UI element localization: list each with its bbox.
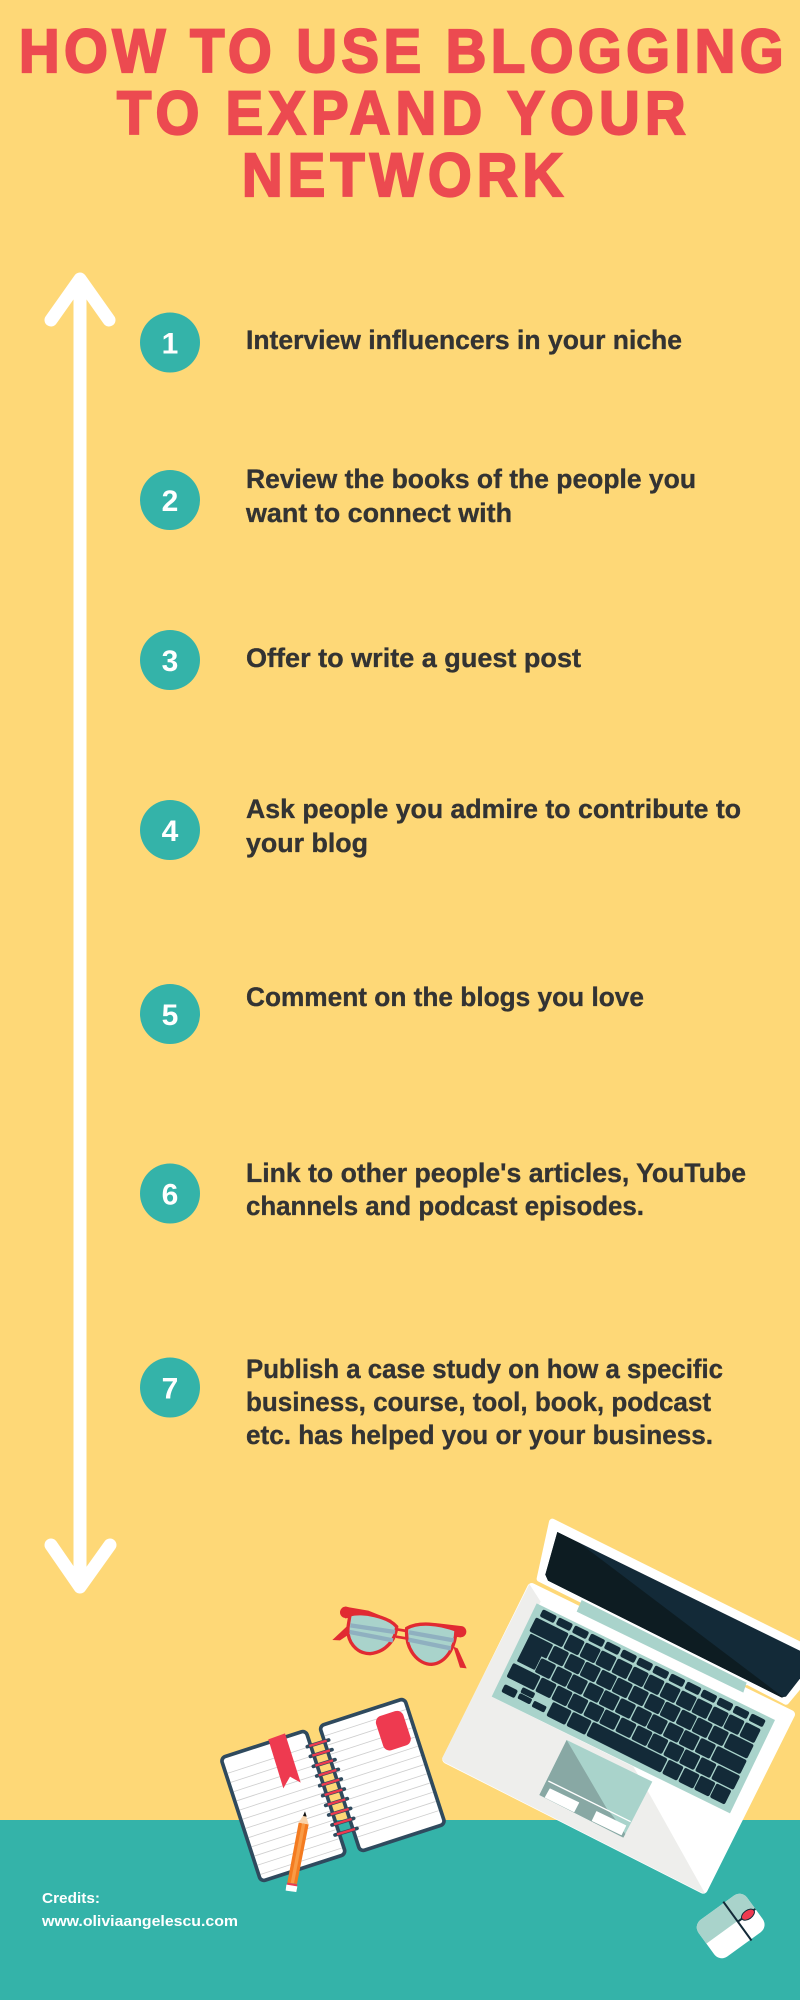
step 7: etc. has helped you or your business. <box>246 1420 713 1450</box>
bookmark <box>268 1733 301 1788</box>
laptop lid <box>540 1522 800 1701</box>
pencil <box>286 1811 309 1892</box>
step 1: 1 <box>162 328 178 360</box>
step 7: 7 <box>162 1372 178 1406</box>
laptop screen <box>545 1532 800 1697</box>
step 1: Interview influencers in your niche <box>246 325 682 355</box>
credits: www.oliviaangelescu.com <box>41 1913 238 1930</box>
step 6: channels and podcast episodes. <box>246 1191 644 1221</box>
step 3 <box>140 630 581 690</box>
credits <box>41 1890 238 1930</box>
step 2: want to connect with <box>245 498 512 528</box>
hinge <box>577 1600 747 1693</box>
step 4 <box>140 794 741 860</box>
step 6 <box>140 1158 746 1224</box>
step 3: 3 <box>162 645 178 678</box>
keys <box>499 1608 768 1805</box>
arrow: double-headed vertical <box>51 279 110 1587</box>
step 2 <box>140 464 696 530</box>
icon: mouse <box>692 1889 769 1963</box>
step 2: Review the books of the people you <box>246 464 696 494</box>
step 4: 4 <box>162 815 179 848</box>
step 7: business, course, tool, book, podcast <box>246 1387 711 1417</box>
step 5: Comment on the blogs you love <box>246 982 644 1012</box>
right page <box>319 1698 445 1852</box>
step 1 <box>140 312 682 372</box>
step 4: Ask people you admire to contribute to <box>246 794 741 824</box>
spiral binding <box>307 1740 357 1835</box>
title <box>19 18 784 210</box>
keyboard panel <box>492 1603 775 1813</box>
laptop base <box>447 1587 791 1889</box>
icon: spiral notebook <box>221 1698 445 1892</box>
step 6: 6 <box>162 1178 178 1212</box>
step 3: Offer to write a guest post <box>246 643 581 673</box>
step 7 <box>140 1354 723 1450</box>
icon: glasses <box>332 1607 467 1668</box>
step 6: Link to other people's articles, YouTube <box>246 1158 746 1188</box>
left page <box>221 1730 346 1882</box>
title: NETWORK <box>242 142 563 210</box>
step 5 <box>140 982 644 1044</box>
icon: laptop <box>442 1522 800 1893</box>
step 7: Publish a case study on how a specific <box>246 1354 723 1384</box>
step 4: your blog <box>246 828 368 858</box>
red note <box>374 1709 413 1752</box>
credits: Credits: <box>42 1890 100 1907</box>
trackpad <box>539 1740 652 1838</box>
title: HOW TO USE BLOGGING <box>19 18 784 86</box>
title: TO EXPAND YOUR <box>117 80 686 148</box>
step 5: 5 <box>162 999 178 1032</box>
step 2: 2 <box>162 485 178 518</box>
